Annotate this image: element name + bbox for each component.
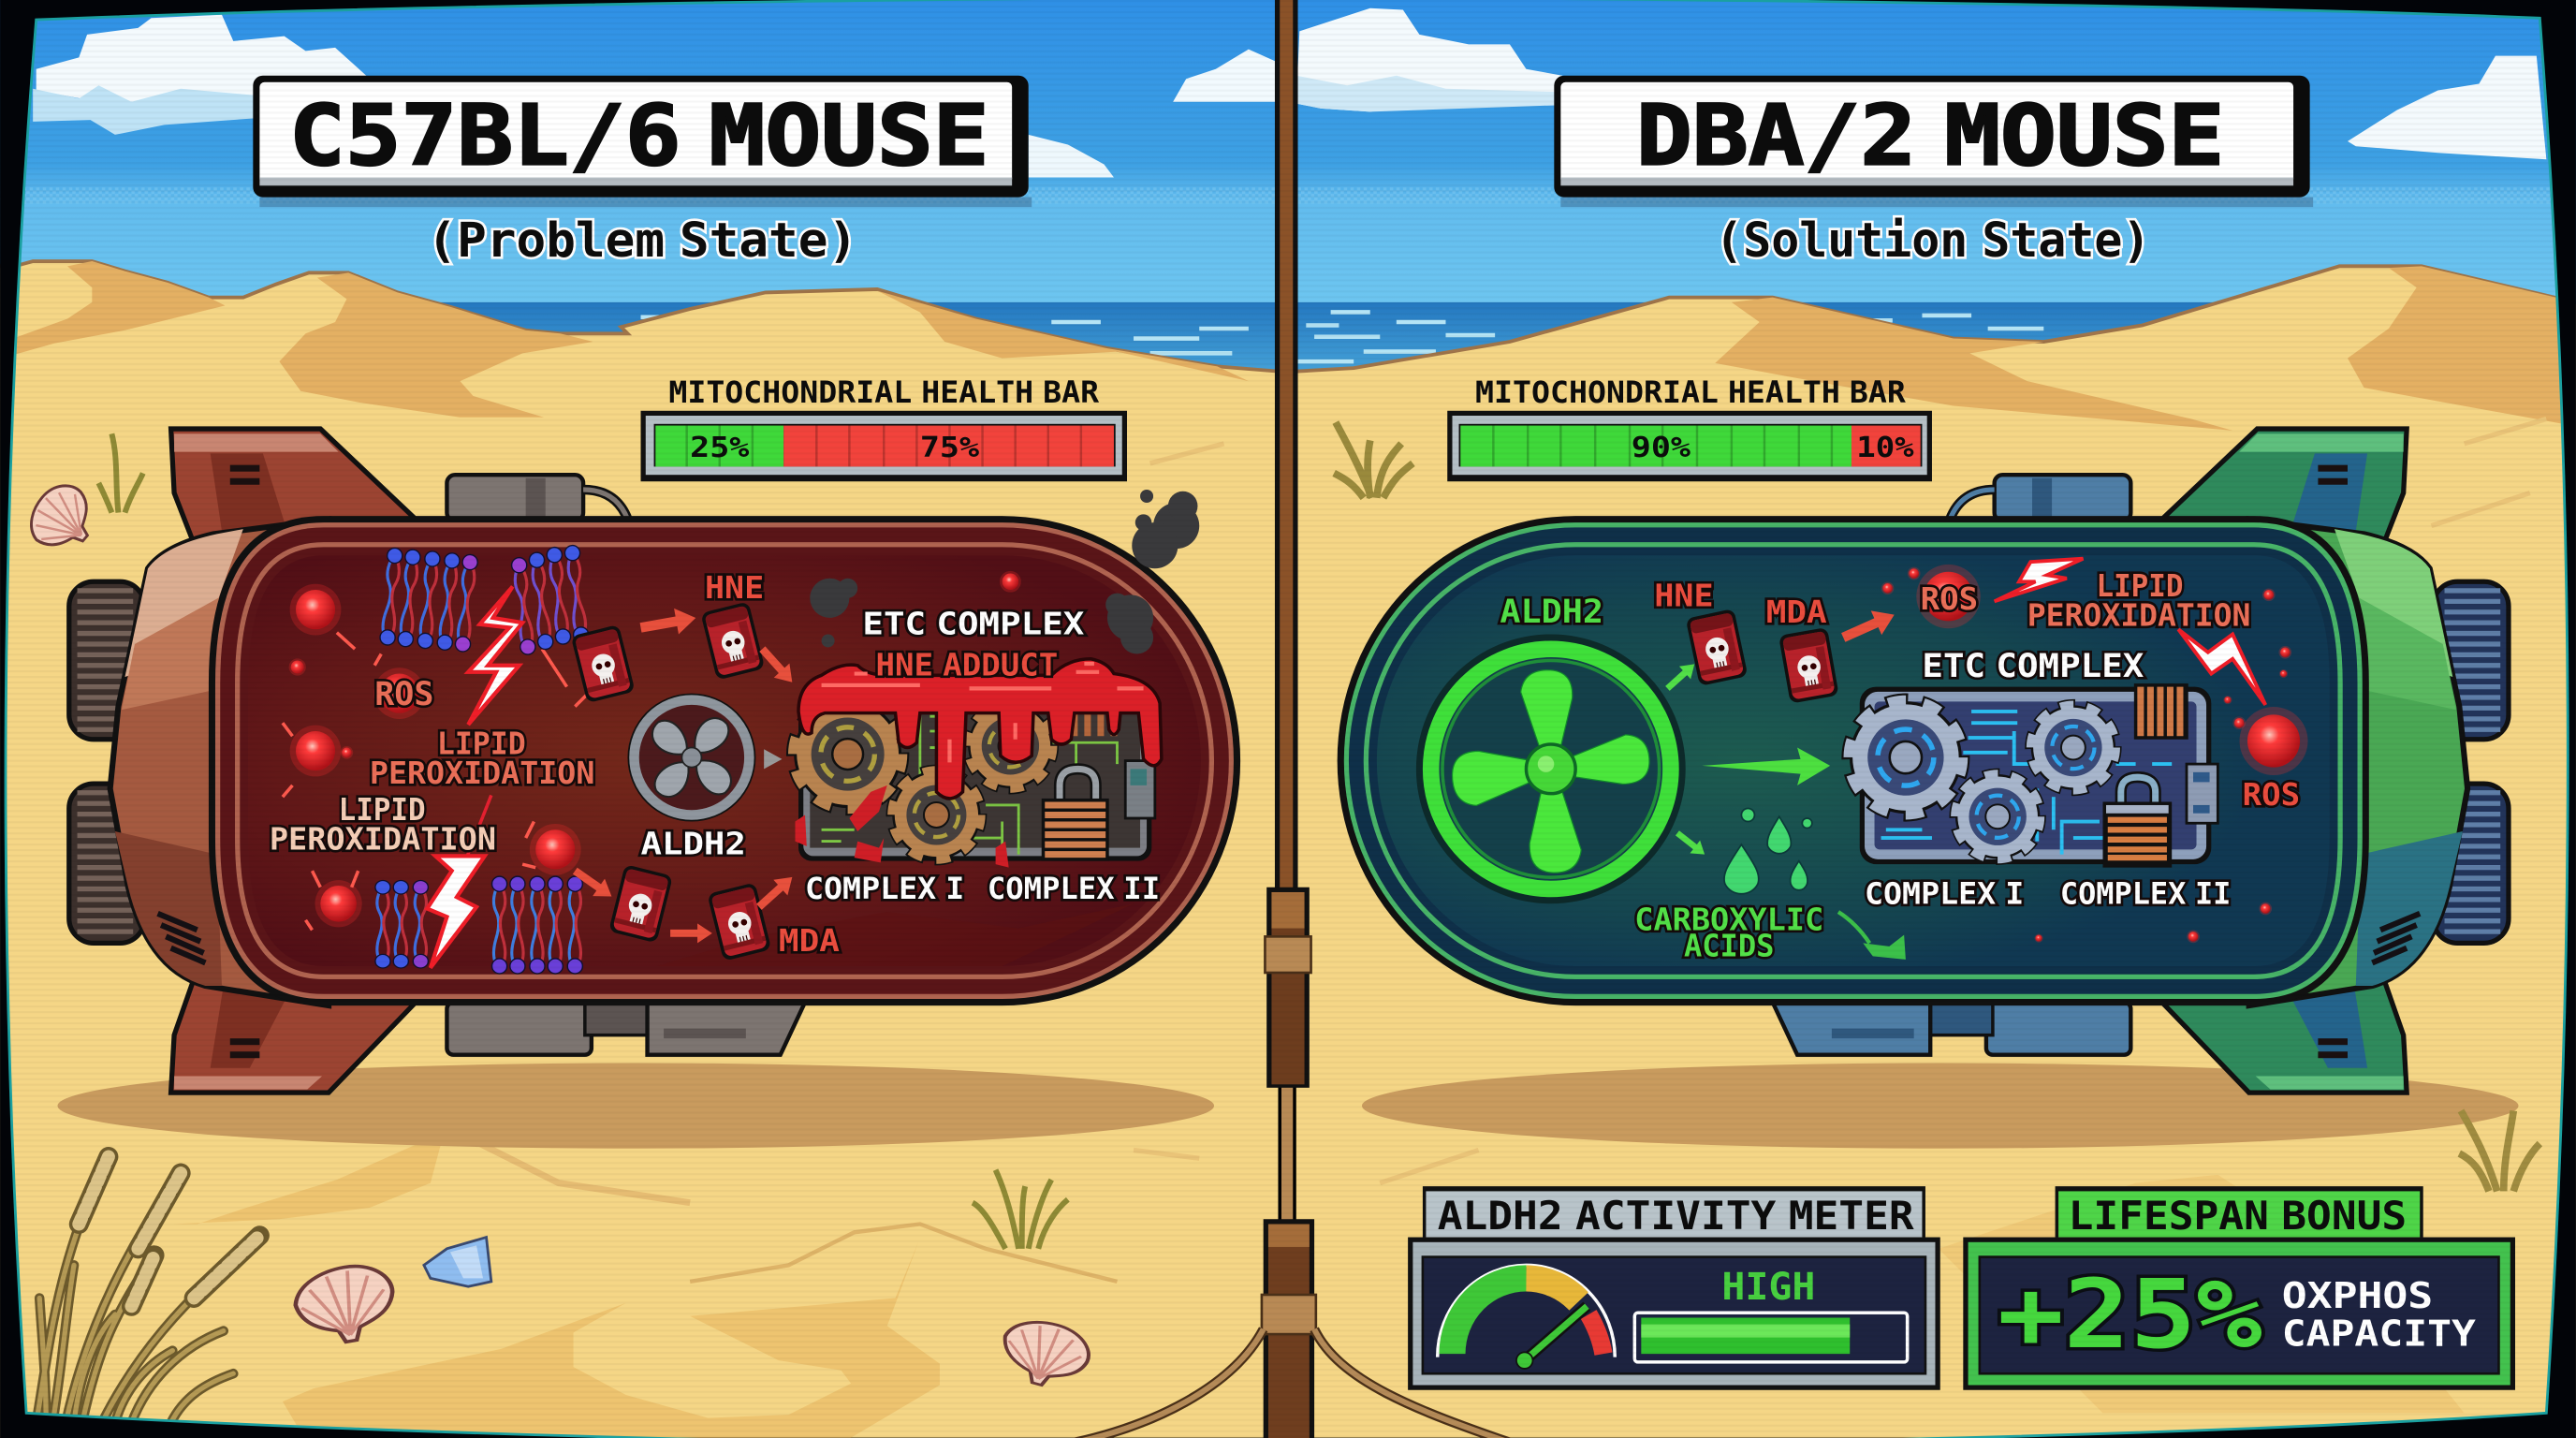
value: plus 25 percent: +25% (1998, 1260, 2262, 1371)
label: lipid peroxidation upper: LIPID (437, 726, 526, 762)
icon: small grass (98, 422, 2539, 1249)
icon: carboxylic acid droplets (1724, 808, 1812, 894)
label: carboxylic acids: CARBOXYLIC (1634, 901, 1823, 937)
barrels: neutralised aldehydes (1686, 609, 1839, 704)
membrane: lipid bilayer top right (510, 545, 590, 655)
health bar left (641, 411, 1127, 481)
arrow: acids out (1838, 912, 1906, 960)
membrane: lipid bilayer bottom right (492, 876, 582, 974)
tab: heading: LIFESPAN BONUS (2069, 1193, 2407, 1239)
background: sand dunes left (0, 261, 1278, 1438)
label: lipid peroxidation upper (370, 726, 594, 791)
icon: top coil (2134, 683, 2188, 740)
icon: lightning bottom (427, 795, 491, 968)
icon: stalled ALDH2 fan (627, 694, 755, 822)
background: sand dunes right (1296, 266, 2576, 1438)
label: ETC complex right: ETC COMPLEX (1922, 647, 2144, 685)
label: OXPHOS capacity (2282, 1275, 2477, 1355)
label: OXPHOS capacity: OXPHOS (2282, 1275, 2433, 1317)
membrane: lipid bilayer top left (379, 548, 478, 653)
title: DBA/2 mouse (1554, 76, 2313, 207)
gears (794, 700, 1053, 859)
health bar label right: MITOCHONDRIAL HEALTH BAR (1475, 376, 1907, 410)
label: ETC complex left: ETC COMPLEX (862, 605, 1084, 641)
title: C57BL/6 mouse: C57BL/6 MOUSE (289, 88, 989, 185)
label: complex II left: COMPLEX II (988, 873, 1160, 906)
label: complex II right: COMPLEX II (2060, 877, 2231, 911)
label: ROS lower right: ROS (2243, 776, 2300, 813)
value: 75 percent: 75% (920, 432, 979, 464)
label: HNE adduct: HNE ADDUCT (875, 646, 1058, 682)
subtitle: solution state: (Solution State) (1715, 213, 2150, 269)
icon: lightning right (2178, 629, 2265, 705)
ROS orbs (1881, 565, 2308, 943)
membrane: lipid bilayer bottom left (375, 880, 428, 968)
label: lipid peroxidation upper: PEROXIDATION (370, 755, 594, 791)
ship shadows on sand (57, 1064, 2519, 1149)
label: ALDH2 left: ALDH2 (641, 826, 746, 862)
label: high: HIGH (1721, 1265, 1815, 1309)
value: 25 percent: 25% (690, 432, 749, 464)
arrow: fan to ETC (1702, 748, 1830, 785)
barrels: toxic aldehydes (571, 601, 771, 961)
center pole and ropes (1075, 0, 1519, 1438)
panel: ALDH2 activity meter (1408, 1186, 1940, 1390)
arrows: red flow (569, 605, 800, 943)
background: sky (0, 0, 2576, 329)
label: lipid peroxidation lower (270, 791, 496, 857)
label: HNE: HNE (705, 569, 764, 606)
label: lipid peroxidation right (2027, 567, 2250, 634)
subtitle: problem state: (Problem State) (427, 213, 857, 269)
label: ROS top right: ROS (1921, 580, 1978, 617)
title: C57BL/6 mouse (253, 76, 1032, 207)
label: lipid peroxidation right: LIPID (2096, 567, 2183, 604)
icon: shells (19, 476, 106, 564)
clouds (33, 8, 2546, 178)
label: lipid peroxidation lower: LIPID (339, 791, 426, 828)
icon: padlock coil (2102, 777, 2172, 868)
panel: healthy ETC machinery (1850, 683, 2217, 868)
gauge (1438, 1265, 1615, 1369)
panel: right mitochondrion ship (solution) (1338, 429, 2509, 1093)
ROS orbs and sparks (283, 571, 1021, 930)
tab: heading: ALDH2 ACTIVITY METER (1438, 1193, 1914, 1239)
arrow: fan to droplets (1673, 827, 1709, 860)
gears (1850, 701, 2115, 858)
icon: lightning top (468, 587, 522, 725)
background: sea (0, 302, 2576, 401)
label: MDA: MDA (779, 922, 840, 959)
label: HNE right: HNE (1654, 578, 1714, 614)
icon: spinning ALDH2 fan (1416, 634, 1686, 903)
label: lipid peroxidation lower: PEROXIDATION (270, 820, 496, 857)
health bar label left: MITOCHONDRIAL HEALTH BAR (668, 376, 1100, 410)
label: complex I left: COMPLEX I (805, 873, 964, 906)
grass and shells decor (19, 422, 2539, 1423)
label: complex I right: COMPLEX I (1865, 877, 2024, 911)
blood slime adduct (798, 659, 1162, 799)
label: carboxylic acids: ACIDS (1684, 927, 1774, 963)
arrow: red to ROS (1837, 603, 1899, 650)
icon: smoke (810, 490, 1199, 654)
label: OXPHOS capacity: CAPACITY (2282, 1313, 2477, 1355)
panel: lifespan bonus (1963, 1186, 2515, 1390)
value: 10 percent: 10% (1856, 432, 1914, 464)
panel: left mitochondrion ship (problem) (69, 429, 1240, 1093)
arrow: green to HNE (1661, 658, 1700, 695)
label: ROS: ROS (374, 675, 433, 713)
panel: damaged ETC machinery (794, 659, 1162, 868)
icon: padlock coil (1042, 769, 1109, 861)
icon: lightning top right (1995, 559, 2083, 601)
value: 90 percent: 90% (1632, 432, 1690, 464)
title: DBA/2 mouse: DBA/2 MOUSE (1636, 88, 2224, 185)
bar: activity level (1634, 1313, 1908, 1362)
label: lipid peroxidation right: PEROXIDATION (2027, 597, 2250, 634)
label: MDA right: MDA (1766, 594, 1827, 630)
icon: wheat grass bottom left (37, 1157, 259, 1423)
health bar right (1447, 411, 1932, 481)
arrow: gray (764, 749, 782, 769)
label: carboxylic acids (1634, 901, 1823, 963)
label: ALDH2 right: ALDH2 (1500, 593, 1603, 631)
coil bars (1071, 703, 1117, 736)
